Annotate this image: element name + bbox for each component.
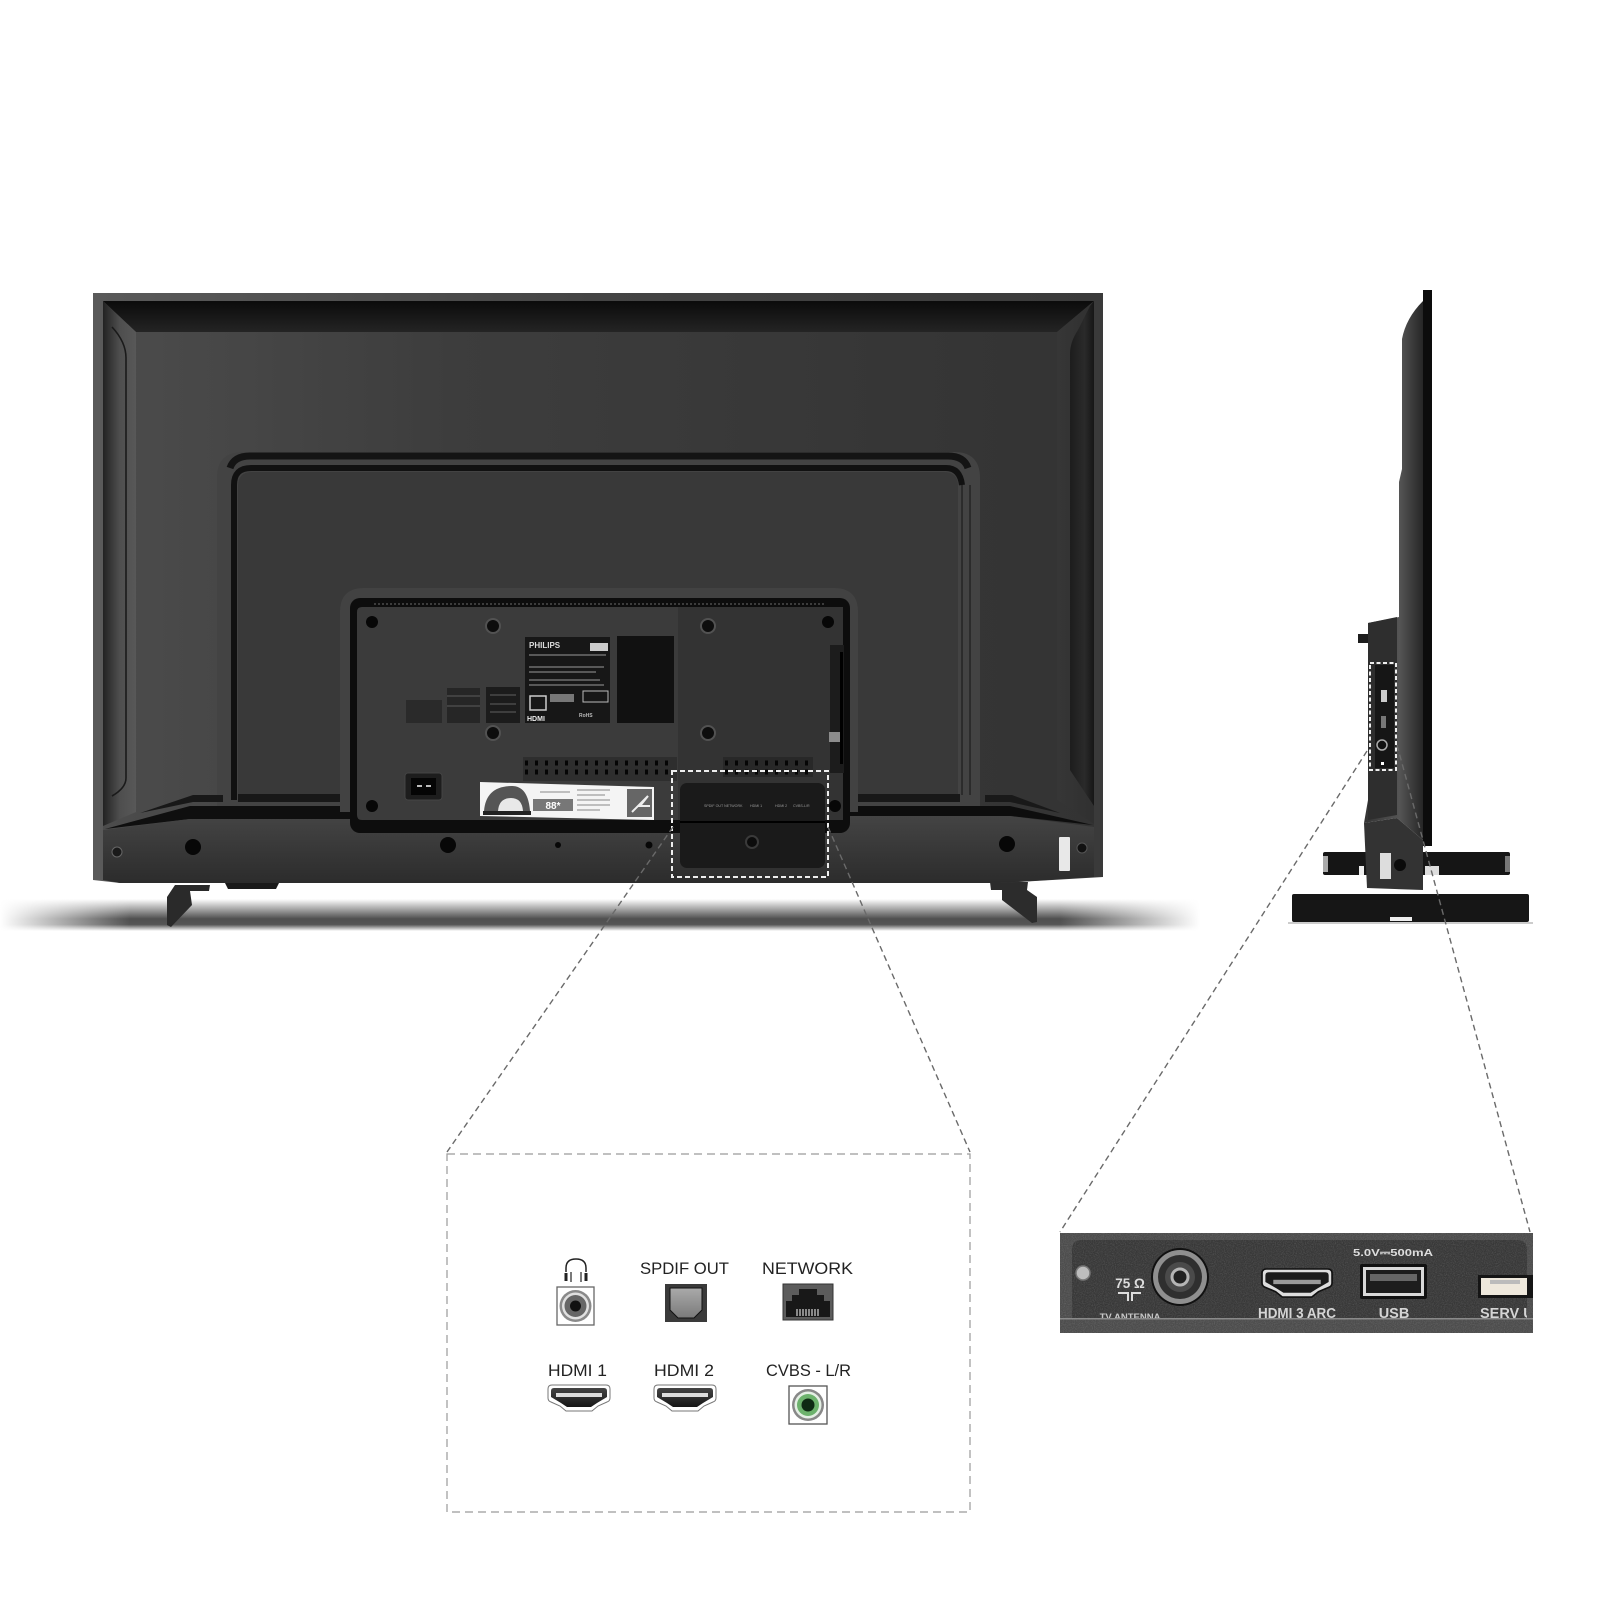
wall mount screws: [486, 619, 715, 740]
icon: headphones: [566, 1259, 586, 1282]
energy label: [480, 782, 654, 820]
icon: optical port: [665, 1284, 707, 1322]
lower dark channel right: [848, 806, 1093, 825]
middle recessed frame: [217, 452, 980, 812]
left foot: [167, 883, 279, 927]
side view of TV: [1288, 290, 1533, 924]
icon: HDMI 3 ARC port: [1262, 1269, 1332, 1297]
right bevel: [1057, 301, 1094, 824]
leader line: side left: [1060, 751, 1367, 1232]
stand shadow: [1288, 922, 1533, 924]
label: 75 ohm: 75 Ω: [1115, 1276, 1145, 1291]
label: USB: USB: [1379, 1306, 1409, 1322]
slide slot: [829, 645, 844, 773]
screen panel edge: [1423, 290, 1432, 846]
white dashed highlight box: [672, 771, 828, 877]
icon: HDMI 1 port: [548, 1385, 610, 1411]
icon: antenna symbol: [1118, 1293, 1141, 1301]
label: SERV U: SERV U: [1480, 1306, 1534, 1322]
icon: service connector: [1478, 1275, 1533, 1298]
dashed callout box: [447, 1154, 970, 1512]
rear view of TV: [93, 293, 1103, 927]
leader line: rear right: [828, 827, 970, 1152]
indicator LED: [1076, 1266, 1090, 1280]
plate speckle texture: [1060, 1233, 1533, 1333]
rear shell: [1364, 301, 1423, 840]
stand housing: [1364, 818, 1423, 890]
top bevel: [103, 301, 1094, 332]
right foot: [990, 882, 1037, 923]
leader line: rear left: [447, 827, 673, 1152]
back foot: [1323, 852, 1510, 875]
icon: USB port: [1360, 1264, 1427, 1299]
white dashed side highlight: [1370, 663, 1396, 770]
vents: [523, 757, 813, 781]
connector pocket with port labels: CVBS-L/R: [793, 804, 810, 808]
screw holes: [112, 616, 1087, 857]
panel: side connector close-up: [1060, 1233, 1534, 1333]
icon: antenna connector: [1151, 1248, 1209, 1306]
icon: headphone jack: [557, 1287, 594, 1325]
plate: [1060, 1233, 1533, 1333]
mains socket: [405, 773, 442, 800]
floor shadow under rear TV: [0, 899, 1200, 931]
icon: HDMI 2 port: [654, 1385, 716, 1411]
Philips rating label: HDMI: [527, 716, 545, 723]
side port strip: [1375, 665, 1394, 768]
Philips rating label: [525, 637, 610, 723]
connector pocket with port labels: HDMI 2: [775, 804, 787, 808]
leader line: side right: [1397, 745, 1530, 1232]
label: USB rating: 5.0V⎓500mA: [1353, 1247, 1434, 1259]
icon: network port: [783, 1284, 833, 1320]
back body: [103, 301, 1094, 836]
Philips rating label: RoHS: [579, 713, 593, 719]
Philips rating label: PHILIPS: [529, 641, 561, 650]
label: SPDIF OUT: SPDIF OUT: [640, 1259, 729, 1278]
connector pocket with port labels: HDMI 1: [750, 804, 762, 808]
connector bay: [340, 588, 858, 833]
label: TV ANTENNA: TV ANTENNA: [1100, 1312, 1161, 1323]
front foot: [1292, 894, 1529, 922]
connector pocket with port labels: [680, 783, 825, 868]
serial sticker: [1059, 837, 1070, 871]
lower dark channel left: [105, 806, 352, 829]
energy label: 88*: [545, 801, 561, 812]
right side strip: [1070, 301, 1094, 806]
label: CVBS - L/R: CVBS - L/R: [766, 1361, 851, 1380]
label: HDMI 3 ARC: HDMI 3 ARC: [1258, 1306, 1336, 1322]
left strip line: [112, 327, 126, 796]
black label block: [617, 636, 674, 723]
icon: CVBS jack: [789, 1386, 827, 1424]
label: HDMI 1: HDMI 1: [548, 1361, 607, 1380]
left side strip: [103, 301, 136, 826]
bay section: [1368, 617, 1397, 820]
outer frame: [93, 293, 1103, 883]
label: NETWORK: NETWORK: [762, 1259, 854, 1278]
faint regulatory labels: [406, 687, 520, 723]
panel: rear connector callout: [447, 1154, 970, 1512]
rear knob: [1358, 634, 1368, 643]
lower bar: [103, 816, 1094, 883]
inner plate: [1072, 1240, 1527, 1318]
label: HDMI 2: HDMI 2: [654, 1361, 714, 1380]
connector pocket with port labels: SPDIF OUT NETWORK: [704, 804, 743, 808]
